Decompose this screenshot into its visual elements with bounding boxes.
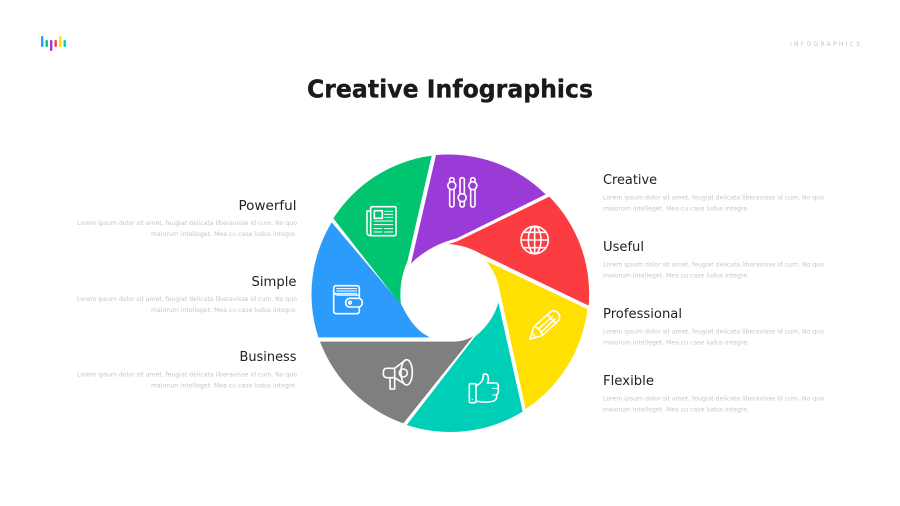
right text: Useful: maiorum intelleget. Mea cu case ludus integre. (603, 272, 749, 280)
icon: sliders (448, 178, 477, 207)
shutter wheel (312, 154, 589, 432)
left text: Business: maiorum intelleget. Mea cu case ludus integre. (151, 382, 297, 390)
left text: Powerful (77, 199, 297, 238)
segment: gray (320, 336, 473, 423)
icon: megaphone (383, 360, 412, 389)
segment: yellow (486, 261, 587, 409)
icon: pencil (530, 311, 560, 339)
header label: INFOGRAPHICS (790, 41, 860, 48)
left text: Powerful: Powerful (238, 199, 296, 214)
icon: wallet (334, 286, 362, 314)
segment: teal (407, 302, 523, 432)
right text: Professional (603, 307, 824, 346)
left text: Powerful: Lorem ipsum dolor sit amet, feugiat delicata liberavisse id cum. No quo (77, 220, 297, 227)
right text: Flexible: maiorum intelleget. Mea cu case ludus integre. (603, 406, 749, 414)
left text: Simple: maiorum intelleget. Mea cu case ludus integre. (151, 307, 297, 314)
right text: Professional: maiorum intelleget. Mea cu case ludus integre. (603, 340, 749, 346)
left text: Business (77, 350, 297, 390)
right text: Flexible: Lorem ipsum dolor sit amet, feugiat delicata liberavisse id cum. No quo (603, 396, 824, 402)
left text: Business: Lorem ipsum dolor sit amet, feugiat delicata liberavisse id cum. No quo (77, 372, 297, 378)
right text: Creative: Lorem ipsum dolor sit amet, feugiat delicata liberavisse id cum. No quo (603, 194, 824, 202)
right text: Professional: Lorem ipsum dolor sit amet, feugiat delicata liberavisse id cum. No quo (603, 328, 824, 336)
right text: Creative: Creative (603, 173, 657, 188)
icon: newspaper (367, 207, 396, 236)
icon: thumbs up (469, 374, 498, 403)
right text: Creative (603, 173, 824, 212)
right text: Professional: Professional (603, 307, 682, 322)
left text: Simple (77, 275, 297, 314)
segment: blue (312, 222, 430, 337)
right text: Flexible: Flexible (603, 374, 654, 389)
segment: red (448, 197, 589, 306)
left text: Powerful: maiorum intelleget. Mea cu case ludus integre. (151, 231, 297, 238)
title: Creative Infographics (307, 74, 593, 104)
right text: Creative: maiorum intelleget. Mea cu case ludus integre. (603, 206, 749, 212)
right text: Flexible (603, 374, 824, 414)
logo (41, 36, 66, 51)
left text: Simple: Lorem ipsum dolor sit amet, feugiat delicata liberavisse id cum. No quo (77, 296, 297, 303)
icon: globe (521, 226, 548, 254)
right text: Useful: Useful (603, 240, 644, 255)
left text: Business: Business (240, 350, 297, 365)
segment: purple (411, 154, 546, 263)
right text: Useful (603, 240, 824, 280)
right text: Useful: Lorem ipsum dolor sit amet, feugiat delicata liberavisse id cum. No quo (603, 262, 824, 268)
left text: Simple: Simple (252, 275, 297, 290)
segment: green (333, 156, 432, 305)
